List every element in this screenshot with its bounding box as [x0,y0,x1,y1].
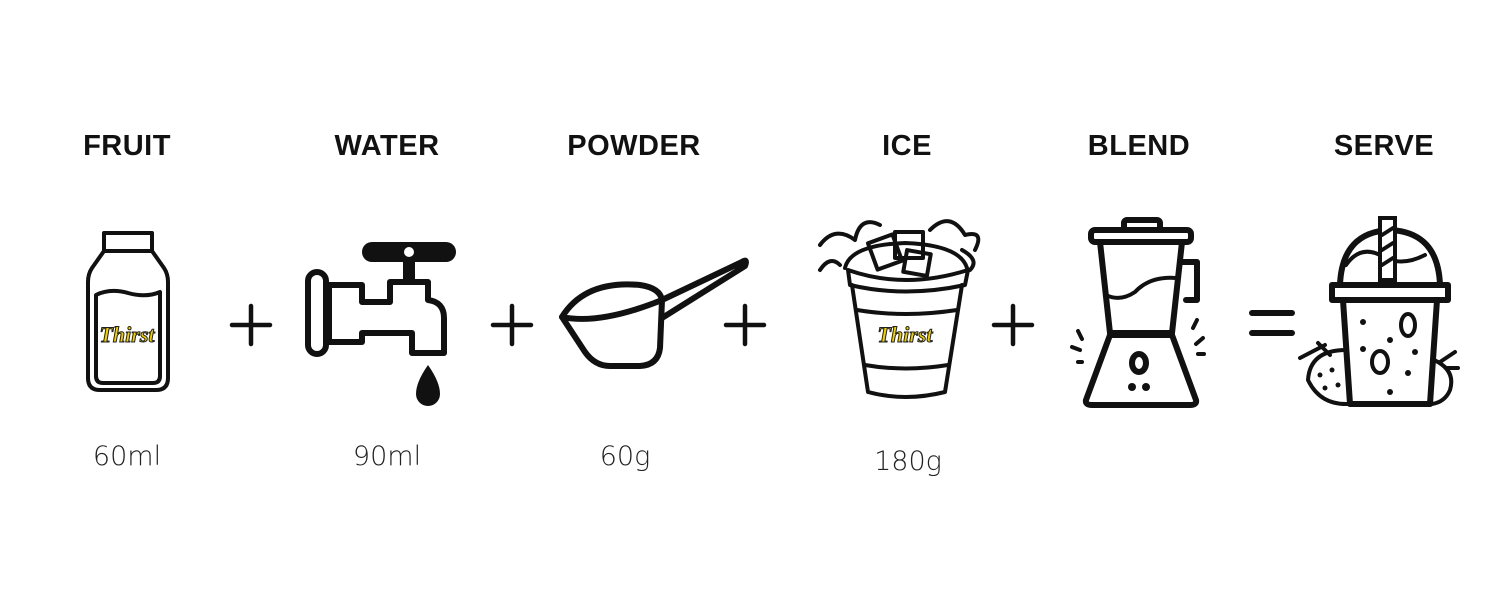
amount: 180g: 180g [874,446,942,477]
icon: scoop [562,261,746,366]
title: SERVE: SERVE [1334,130,1434,162]
icon: tap [308,242,456,406]
amount: 60g: 60g [600,441,650,472]
title: WATER: WATER [334,130,440,162]
icon: ice cup: Thirst [877,322,933,347]
amount: 60ml: 60ml [93,441,161,472]
icon: ice cup [820,221,978,397]
title: POWDER: POWDER [567,130,701,162]
icon: blender [1072,220,1204,405]
title: BLEND: BLEND [1088,130,1190,162]
plus 4 [994,306,1032,344]
icon: bottle: Thirst [99,322,155,347]
plus 1 [232,306,270,344]
icon: served drink [1300,218,1458,404]
title: FRUIT: FRUIT [83,130,171,162]
amount: 90ml: 90ml [353,441,421,472]
icon: bottle [88,233,168,390]
title: ICE: ICE [882,130,932,162]
plus 2 [493,306,531,344]
equals [1252,313,1292,333]
plus 3 [726,306,764,344]
